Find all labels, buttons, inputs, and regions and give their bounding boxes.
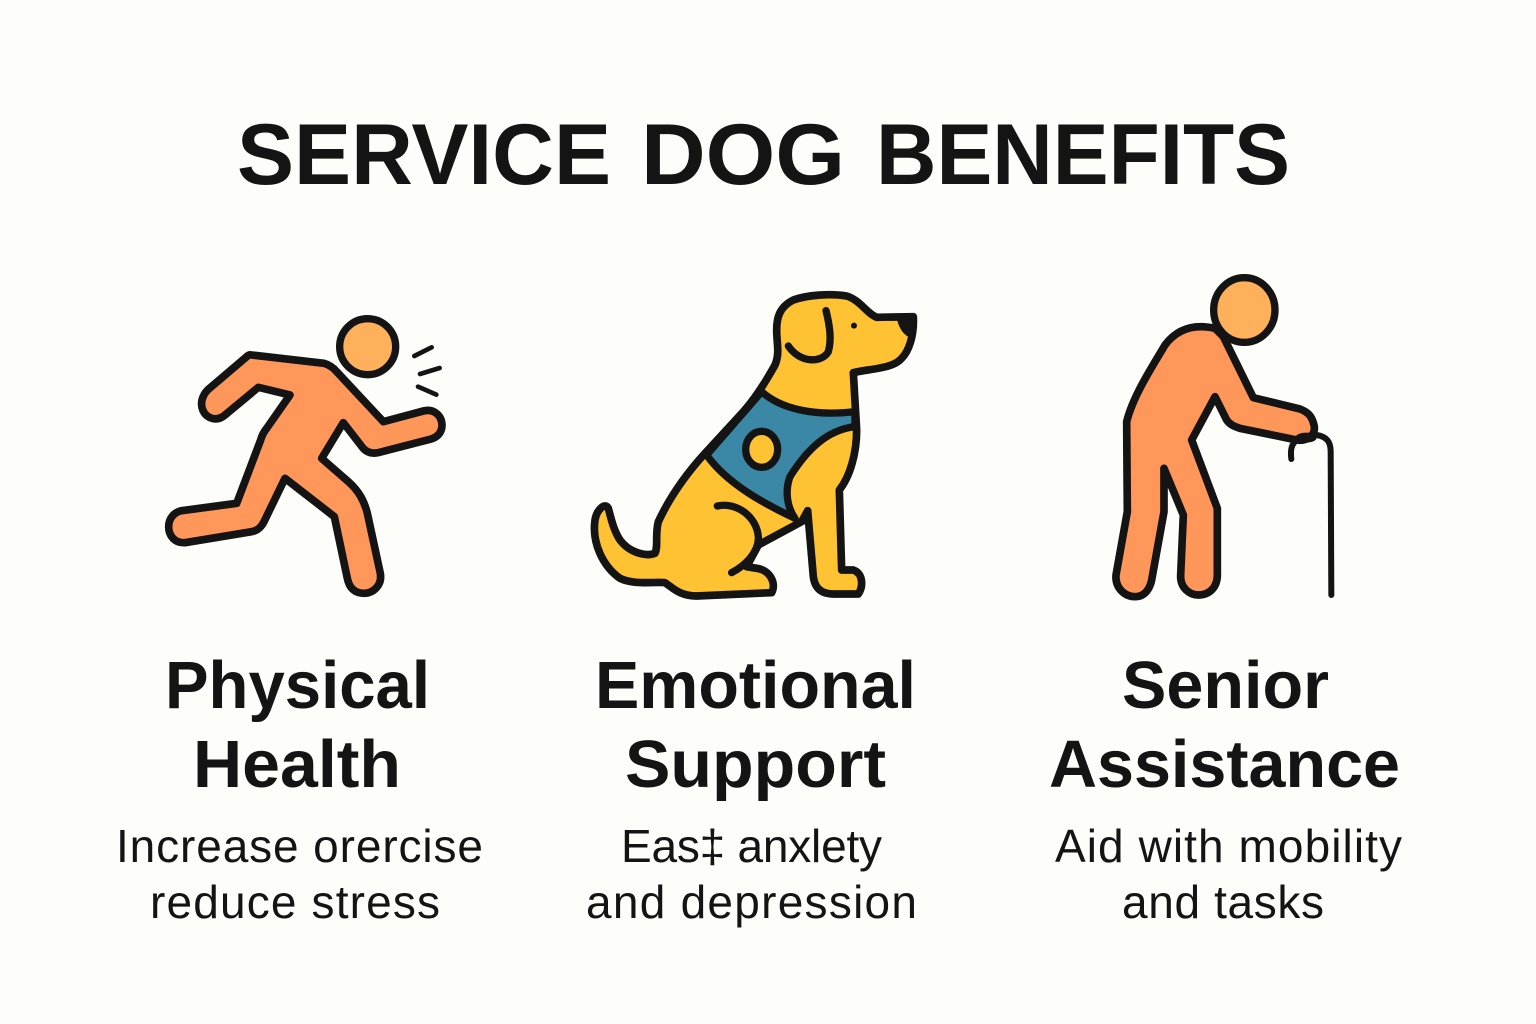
heading: physical health: Physical xyxy=(165,648,430,723)
dog nose xyxy=(897,315,916,337)
icon: running person xyxy=(169,319,442,593)
icon: senior with cane xyxy=(1116,278,1331,597)
senior body xyxy=(1116,327,1314,597)
heading: senior assistance: Assistance xyxy=(1049,727,1400,802)
text: physical health description: reduce stress xyxy=(150,876,440,928)
senior head xyxy=(1214,278,1275,342)
title: BENEFITS xyxy=(876,107,1290,203)
heading: emotional support xyxy=(595,648,916,802)
hind leg line xyxy=(717,505,758,573)
dog body xyxy=(594,295,913,596)
runner head xyxy=(340,319,396,375)
text: emotional support description xyxy=(586,820,917,928)
heading: physical health: Health xyxy=(193,727,401,802)
text: senior assistance description: Aid with mobility xyxy=(1055,820,1402,872)
panel: physical health xyxy=(116,319,483,928)
dog ear xyxy=(788,311,830,360)
heading: senior assistance xyxy=(1049,648,1400,802)
text: emotional support description: Eas‡ anxlety xyxy=(621,820,882,872)
panel: emotional support xyxy=(586,295,917,928)
title: SERVICE xyxy=(237,107,611,203)
title: DOG xyxy=(641,107,845,203)
text: senior assistance description xyxy=(1055,820,1402,928)
hand grip xyxy=(1295,433,1317,443)
vest xyxy=(707,392,855,518)
front leg line xyxy=(804,511,808,521)
title xyxy=(237,107,1290,203)
runner body xyxy=(169,355,442,593)
text: senior assistance description: and tasks xyxy=(1122,876,1324,928)
text: physical health description xyxy=(116,820,483,928)
heading: emotional support: Support xyxy=(625,727,886,802)
dog eye xyxy=(851,323,857,329)
text: emotional support description: and depression xyxy=(586,876,917,928)
heading: senior assistance: Senior xyxy=(1122,648,1329,723)
motion lines xyxy=(414,347,440,395)
heading: physical health xyxy=(165,648,430,802)
icon: service dog with vest xyxy=(594,295,916,596)
panel: senior assistance xyxy=(1049,278,1402,928)
heading: emotional support: Emotional xyxy=(595,648,916,723)
vest badge xyxy=(746,431,778,467)
text: physical health description: Increase orercise xyxy=(116,820,483,872)
cane xyxy=(1291,435,1331,595)
